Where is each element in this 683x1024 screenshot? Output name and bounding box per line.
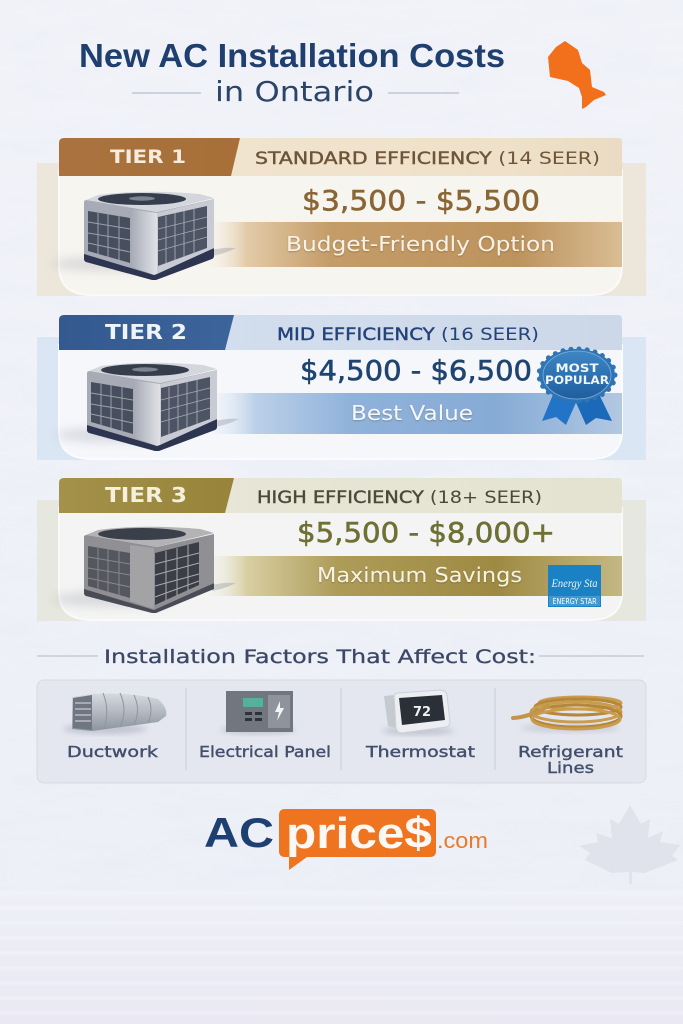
label: Ductwork	[67, 743, 158, 761]
label: Electrical Panel	[199, 743, 331, 761]
header: high efficiency: TIER 3	[105, 483, 187, 507]
band: Best Value: Best Value	[351, 401, 473, 425]
header: mid efficiency: TIER 2	[105, 320, 187, 344]
header: standard efficiency	[59, 138, 622, 176]
title	[79, 37, 505, 108]
header: standard efficiency: TIER 1	[110, 146, 186, 168]
band: Budget-Friendly Option: Budget-Friendly Option	[286, 232, 555, 256]
icon: maple leaf watermark	[579, 805, 680, 884]
label: Thermostat	[365, 743, 475, 761]
price: $3,500 - $5,500	[302, 184, 540, 217]
badge: most popular	[539, 349, 615, 425]
factor: ductwork	[63, 693, 166, 761]
factor: thermostat: 72	[413, 705, 431, 720]
panel: tier 1	[37, 138, 646, 296]
heading: installation factors: Installation Factors That Affect Cost:	[104, 646, 536, 668]
icon: AC unit	[55, 363, 239, 451]
factor: electrical panel	[199, 691, 331, 761]
band: Maximum Savings	[205, 556, 622, 596]
icon: Energy Star: Energy Sta	[551, 576, 598, 590]
price: $5,500 - $8,000+	[297, 516, 555, 549]
icon: Ontario map	[548, 41, 606, 109]
header: mid efficiency: MID EFFICIENCY (16 SEER)	[277, 325, 539, 344]
panel: tier 3	[37, 478, 646, 621]
logo: ACprice$.com	[204, 809, 488, 870]
subheading: in Ontario: in Ontario	[215, 75, 374, 108]
label: Refrigerant	[518, 743, 623, 761]
badge: most popular: MOST	[556, 361, 599, 375]
badge: most popular: POPULAR	[545, 373, 609, 387]
factor: refrigerant lines: Lines	[547, 759, 594, 777]
band: Maximum Savings: Maximum Savings	[317, 563, 522, 587]
icon: Energy Star: ENERGY STAR	[552, 597, 596, 606]
logo: ACprice$.com: price$	[286, 809, 432, 858]
band: Budget-Friendly Option	[205, 222, 622, 267]
band: Best Value	[205, 393, 622, 434]
price: $4,500 - $6,500	[300, 354, 532, 387]
panel: tier 2	[37, 315, 646, 460]
logo: ACprice$.com: .com	[437, 828, 488, 853]
icon: AC unit	[52, 192, 236, 280]
header: standard efficiency: STANDARD EFFICIENCY (14 SEER)	[255, 149, 600, 168]
factor: refrigerant lines	[513, 697, 623, 777]
heading: New AC Installation Costs: New AC Installation Costs	[79, 37, 505, 74]
header: mid efficiency	[59, 315, 622, 350]
panel: installation factors	[37, 680, 646, 783]
logo: ACprice$.com: AC	[204, 809, 274, 856]
header: high efficiency	[59, 478, 622, 513]
factor: thermostat	[365, 690, 475, 761]
header: high efficiency: HIGH EFFICIENCY (18+ SEER)	[257, 488, 542, 507]
icon: AC unit	[52, 527, 236, 613]
icon: Energy Star	[548, 565, 601, 607]
